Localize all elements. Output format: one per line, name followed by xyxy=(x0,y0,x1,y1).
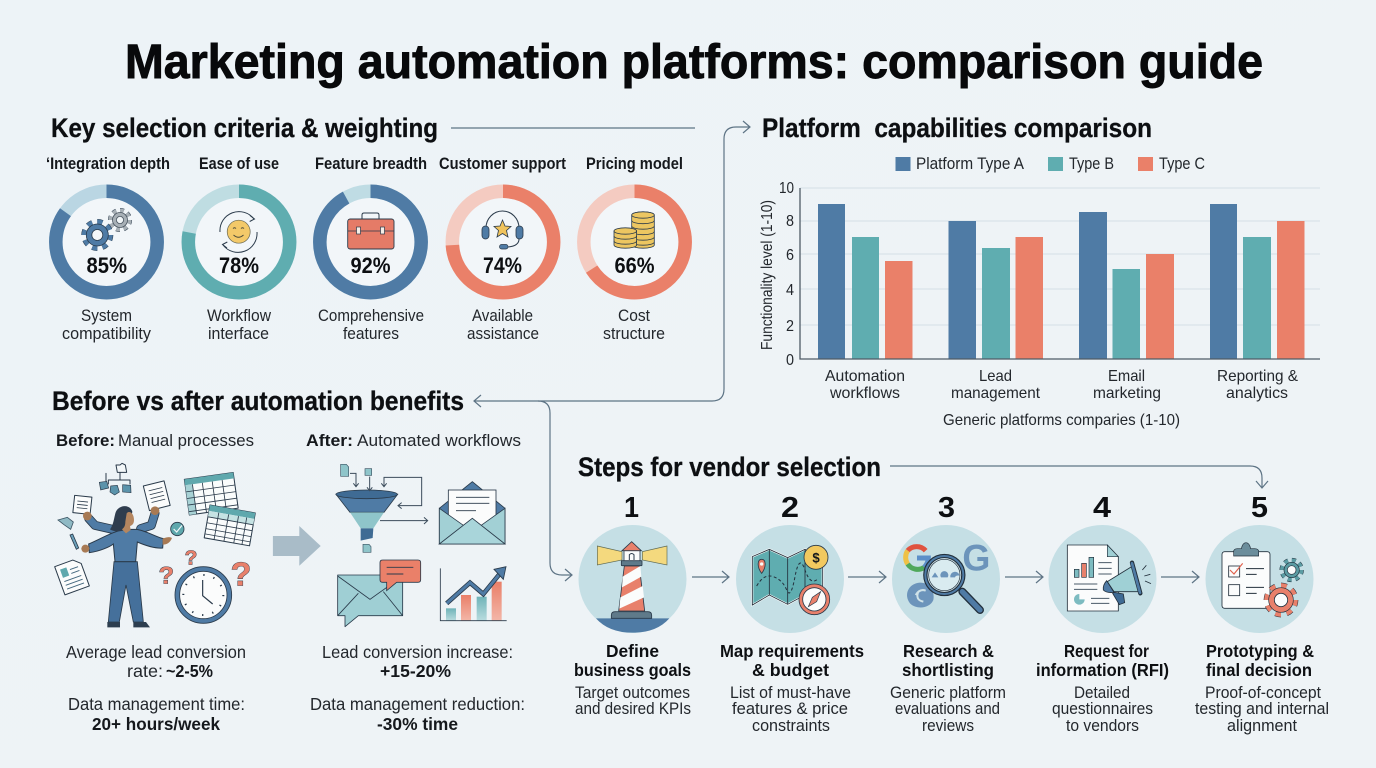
icon: check badge xyxy=(171,522,184,536)
text: shortlisting xyxy=(902,660,994,680)
icons: question marks xyxy=(159,546,251,593)
person juggling tasks xyxy=(81,506,172,627)
x-axis title: Generic platforms comparies (1-10) xyxy=(943,412,1180,429)
criterion: ease of use xyxy=(188,155,290,343)
y-axis ticks: 2 xyxy=(786,318,794,335)
criterion: feature breadth xyxy=(315,155,427,343)
bars: lead management xyxy=(948,221,1043,359)
icon: spreadsheet back xyxy=(184,472,238,515)
heading: steps for vendor selection: Steps for vendor selection xyxy=(578,452,881,482)
text xyxy=(574,641,691,718)
y-axis ticks xyxy=(779,180,794,369)
bar chart xyxy=(759,180,1320,429)
step 3: research and shortlisting xyxy=(890,492,1006,735)
title: Marketing automation platforms: comparison guide xyxy=(125,36,1263,89)
text: before metrics: ~2-5% xyxy=(166,661,213,681)
text: before metrics: Average lead conversion xyxy=(66,642,246,662)
icons: question marks: ? xyxy=(159,562,174,589)
icon: clipboard with gears xyxy=(1222,543,1301,614)
text: Define xyxy=(606,641,659,661)
icon: mail with chat bubble xyxy=(338,560,421,627)
icon: search logos and magnifier: G xyxy=(962,537,990,579)
text: to vendors xyxy=(1066,716,1139,735)
text: Generic platform xyxy=(890,683,1006,702)
text xyxy=(1036,641,1169,735)
y-axis ticks: 10 xyxy=(779,180,794,197)
icon: map with coin and compass xyxy=(752,545,830,615)
chart legend: Platform Type A xyxy=(916,155,1024,173)
heading: key selection criteria: Key selection criteria & weighting xyxy=(51,113,438,143)
text: Target outcomes xyxy=(575,683,690,702)
step 5: prototyping and final decision xyxy=(1195,492,1329,735)
text: List of must-have xyxy=(730,683,851,702)
icon: pen xyxy=(70,534,79,549)
label: after: After: xyxy=(306,431,353,450)
text xyxy=(720,641,864,735)
criterion: feature breadth: 92% xyxy=(350,253,390,278)
category labels: Reporting & xyxy=(1217,368,1298,385)
criterion: feature breadth: Feature breadth xyxy=(315,155,427,173)
text: questionnaires xyxy=(1052,699,1153,718)
icon: resume sheet xyxy=(55,558,89,595)
icon: clock xyxy=(175,567,232,623)
chart legend: Type B xyxy=(1069,155,1114,173)
text: information (RFI) xyxy=(1036,660,1169,680)
text: evaluations and xyxy=(895,699,1000,718)
criterion: pricing model: structure xyxy=(603,324,665,343)
heading: platform capabilities: Platform capabilities comparison xyxy=(762,113,1152,143)
bars: email marketing xyxy=(1079,212,1174,359)
panel: steps for vendor selection xyxy=(574,452,1329,735)
text xyxy=(1195,641,1329,735)
label: before: Before: xyxy=(56,431,115,450)
arrow: to step 5 xyxy=(890,466,1268,488)
icon: network diagram xyxy=(99,463,131,495)
illustration: automated workflows xyxy=(336,464,507,627)
panel: key selection criteria xyxy=(46,113,685,343)
text: features & price xyxy=(732,699,848,718)
icon: search logos and magnifier xyxy=(906,537,990,610)
y-axis title: Functionality level (1-10) xyxy=(759,200,776,350)
step 5: prototyping and final decision: 5 xyxy=(1251,492,1268,524)
criterion: ease of use: Ease of use xyxy=(199,155,279,173)
panel: before vs after automation benefits xyxy=(52,386,525,734)
text: after metrics xyxy=(310,642,525,734)
icon: open envelope with letter xyxy=(439,482,505,544)
criterion: pricing model: Pricing model xyxy=(586,155,683,173)
icon: paper plane xyxy=(58,517,73,529)
y-axis ticks: 4 xyxy=(786,282,794,299)
text: before metrics: Data management time: xyxy=(68,694,245,714)
text: before metrics: rate: xyxy=(127,661,163,681)
chart legend: Type C xyxy=(1159,155,1205,173)
text: final decision xyxy=(1206,660,1312,680)
text: Request for xyxy=(1064,641,1149,661)
arrow: step 4 to 5 xyxy=(1161,571,1199,583)
text xyxy=(890,641,1006,735)
criterion: customer support: Customer support xyxy=(439,155,566,173)
step 4: request for information: 4 xyxy=(1093,492,1111,524)
text: after metrics: Data management reduction: xyxy=(310,694,525,714)
text: testing and internal xyxy=(1195,699,1329,718)
icon: gears xyxy=(84,210,130,248)
icons: question marks: ? xyxy=(231,556,251,593)
text: Research & xyxy=(903,641,994,661)
criterion: ease of use: interface xyxy=(208,324,269,343)
icon: document right xyxy=(143,481,170,511)
criterion: ease of use: 78% xyxy=(219,253,259,278)
criterion: ease of use: Workflow xyxy=(207,306,272,325)
icon: document left xyxy=(73,495,92,514)
text: & budget xyxy=(752,660,829,680)
criterion: customer support: Available xyxy=(472,306,533,325)
y-axis ticks: 8 xyxy=(786,213,794,230)
illustration: overwhelmed worker with manual tasks xyxy=(55,463,255,627)
icon: briefcase xyxy=(348,213,394,249)
criterion: integration depth: compatibility xyxy=(62,324,151,343)
text: and desired KPIs xyxy=(575,699,691,718)
icon: coins xyxy=(614,212,654,248)
category labels: Email xyxy=(1108,368,1145,385)
criterion: feature breadth: Comprehensive xyxy=(318,306,424,325)
icon: smiley with cycle arrows xyxy=(220,212,257,252)
text: Map requirements xyxy=(720,641,864,661)
text: after metrics: -30% time xyxy=(377,714,458,734)
text: after metrics: Lead conversion increase: xyxy=(322,642,513,662)
text: Detailed xyxy=(1074,683,1130,702)
y-axis ticks: 0 xyxy=(786,352,794,369)
icon: lighthouse xyxy=(596,542,669,633)
criterion: feature breadth: features xyxy=(343,324,399,343)
criterion: customer support xyxy=(439,155,566,343)
label: after: Automated workflows xyxy=(357,431,521,450)
y-axis ticks: 6 xyxy=(786,247,794,264)
icon: headset with star xyxy=(482,211,523,249)
arrow: step 2 to 3 xyxy=(848,571,886,583)
arrow: criteria to before/after and capabilities xyxy=(451,121,750,581)
step 3: research and shortlisting: 3 xyxy=(938,492,955,524)
chart legend xyxy=(896,155,1205,173)
text: alignment xyxy=(1227,716,1297,735)
step 2: map requirements and budget: 2 xyxy=(781,492,799,524)
criterion: integration depth: System xyxy=(81,306,132,325)
arrow: step 3 to 4 xyxy=(1005,571,1043,583)
bars: automation workflows xyxy=(818,204,912,359)
category labels: Automation xyxy=(825,368,905,385)
criterion: customer support: 74% xyxy=(483,253,522,278)
icon: map with coin and compass: $ xyxy=(812,550,820,566)
panel: platform capabilities comparison xyxy=(759,113,1320,429)
icon: growth chart xyxy=(440,567,507,621)
arrow: step 1 to 2 xyxy=(692,571,729,583)
heading: before vs after: Before vs after automation benefits xyxy=(52,386,464,416)
text: constraints xyxy=(752,716,830,735)
text: Proof-of-concept xyxy=(1205,683,1321,702)
criterion: pricing model: Cost xyxy=(618,306,650,325)
icon: document with megaphone xyxy=(1067,545,1151,611)
text: before metrics xyxy=(66,642,246,734)
icons: question marks: ? xyxy=(185,546,197,569)
text: business goals xyxy=(574,660,691,680)
label: before xyxy=(56,431,254,450)
criterion: integration depth: 85% xyxy=(86,253,127,278)
text: reviews xyxy=(922,716,974,735)
bars: reporting and analytics xyxy=(1210,204,1304,359)
criterion: integration depth: ‘Integration depth xyxy=(46,155,170,173)
category labels: management xyxy=(951,385,1041,402)
criterion: pricing model xyxy=(584,155,685,343)
text: Prototyping & xyxy=(1206,641,1314,661)
category labels: analytics xyxy=(1226,385,1288,402)
text: before metrics: 20+ hours/week xyxy=(92,714,220,734)
category labels: Lead xyxy=(979,368,1012,385)
category labels: workflows xyxy=(829,385,900,402)
criterion: pricing model: 66% xyxy=(614,253,654,278)
arrow: before to after xyxy=(273,526,321,566)
label: before: Manual processes xyxy=(118,431,254,450)
step 1: define business goals xyxy=(574,492,691,718)
text: after metrics: +15-20% xyxy=(380,661,451,681)
criterion: integration depth xyxy=(46,155,170,343)
icon: spreadsheet front xyxy=(204,505,255,546)
criterion: customer support: assistance xyxy=(467,324,539,343)
step 2: map requirements and budget xyxy=(720,492,864,735)
step 4: request for information xyxy=(1036,492,1169,735)
category labels xyxy=(825,368,1298,402)
step 1: define business goals: 1 xyxy=(624,492,639,524)
category labels: marketing xyxy=(1093,385,1161,402)
icon: funnel xyxy=(336,464,428,552)
